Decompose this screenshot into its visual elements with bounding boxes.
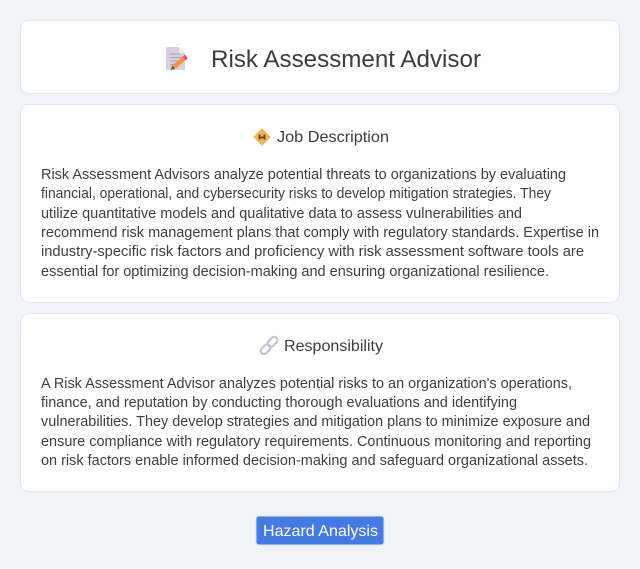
text block: job description: utilize quantitative models and qualitative data to assess vulnerabilities and: [41, 206, 522, 222]
text block: job description: financial, operational, and cybersecurity risks to develop mitigation strategies. They: [41, 186, 552, 202]
button: hazard analysis: Hazard Analysis: [263, 523, 378, 540]
text block: job description: [41, 167, 599, 280]
text block: responsibility: vulnerabilities. They develop strategies and mitigation plans to minimize exposure and: [41, 414, 590, 430]
icon: document with pencil: [166, 47, 186, 70]
panel: job description: [20, 104, 620, 302]
text block: responsibility: ensure compliance with regulatory requirements. Continuous monitoring and reporting: [41, 434, 591, 450]
icon: construction sign: [254, 129, 270, 145]
text block: responsibility: on risk factors enable informed decision-making and safeguard organizational assets.: [41, 453, 588, 469]
heading: title: Risk Assessment Advisor: [211, 46, 481, 73]
text block: job description: industry-specific risk factors and proficiency with risk assessment software tools are: [41, 244, 584, 260]
text block: job description: Risk Assessment Advisors analyze potential threats to organizations by evaluating: [41, 167, 566, 183]
text block: responsibility: A Risk Assessment Advisor analyzes potential risks to an organization's operations,: [41, 376, 572, 392]
icon: chain link: [259, 336, 279, 355]
heading: job description: Job Description: [277, 129, 389, 146]
panel: responsibility: [20, 314, 620, 492]
text block: job description: essential for optimizing decision-making and ensuring organizational resilience.: [41, 264, 549, 280]
text block: job description: recommend risk management plans that comply with regulatory standards. Expertise in: [41, 225, 599, 241]
text block: responsibility: finance, and reputation by conducting thorough evaluations and identifying: [41, 395, 517, 411]
text block: responsibility: [41, 376, 591, 469]
heading: responsibility: Responsibility: [284, 338, 383, 355]
panel: title card: [20, 20, 620, 94]
button: hazard analysis: [256, 516, 384, 545]
